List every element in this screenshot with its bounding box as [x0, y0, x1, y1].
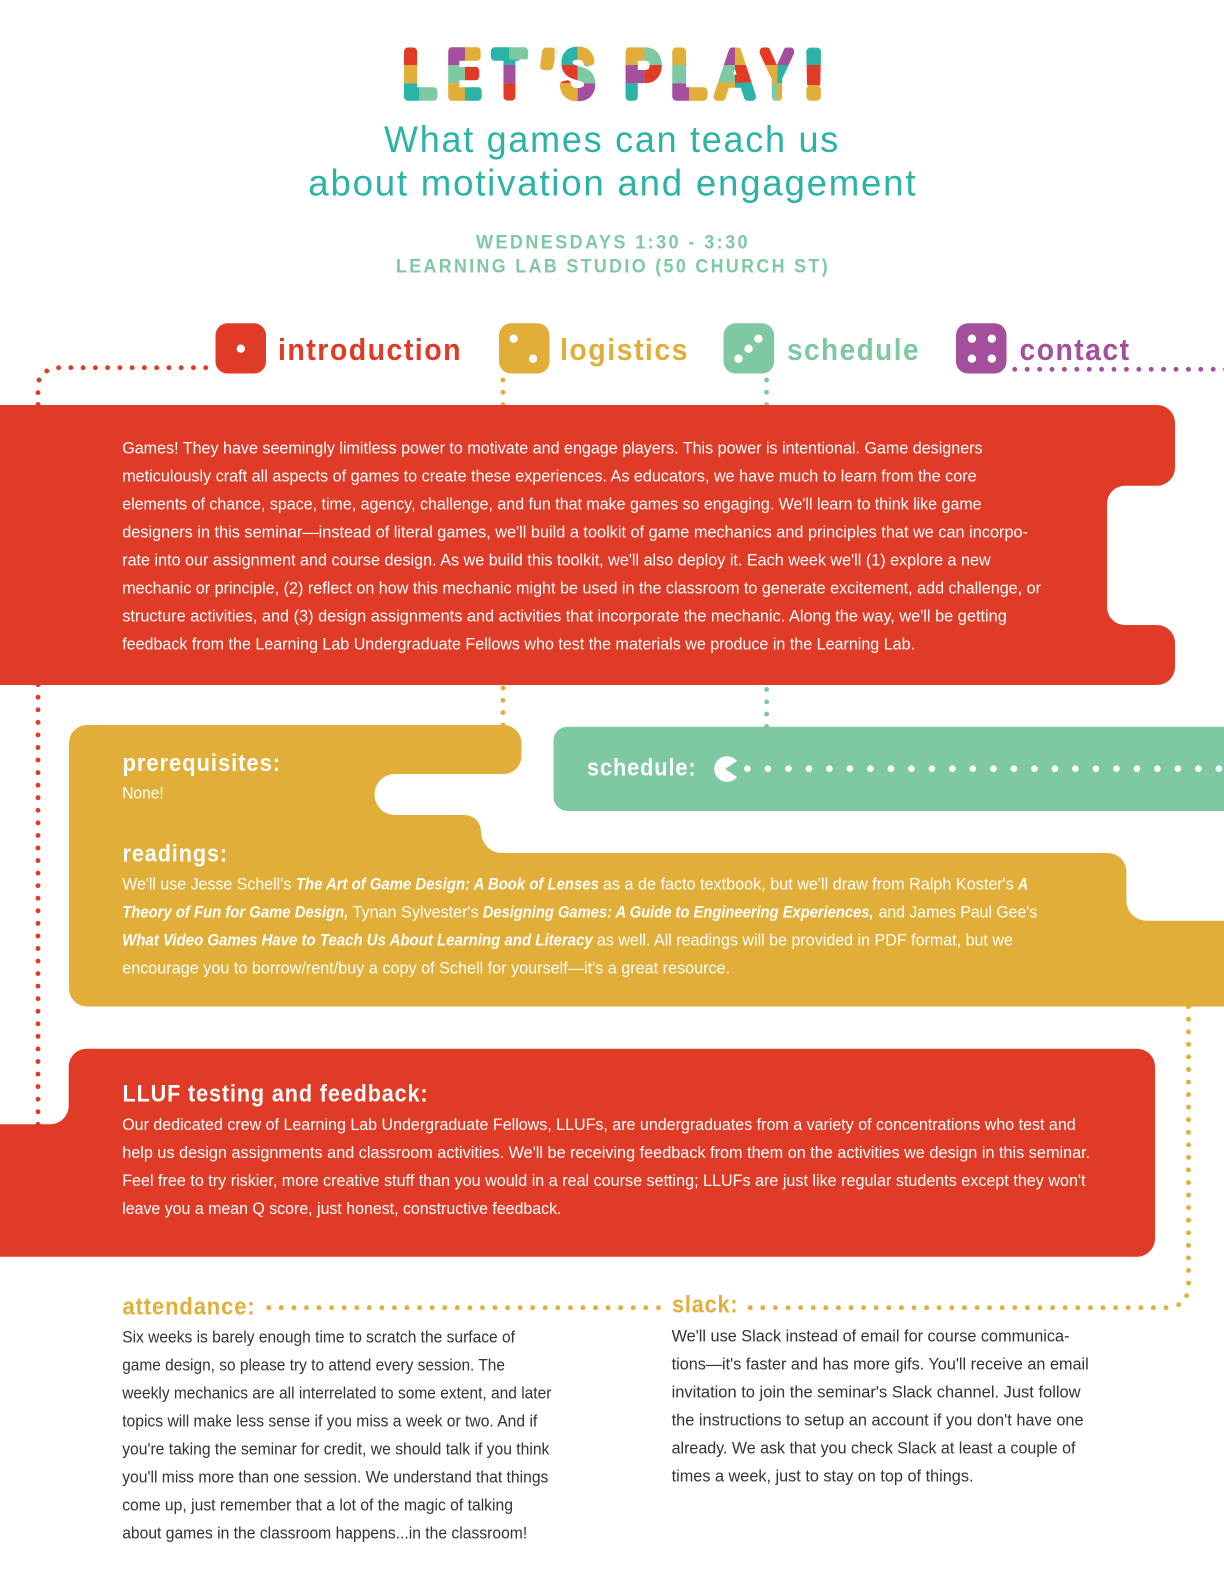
attendance text: Six weeks is barely enough time to scratch the surface of [122, 1328, 515, 1347]
nav: logistics: logistics [560, 332, 689, 367]
prerequisites text: None! [122, 784, 164, 802]
introduction body text: elements of chance, space, time, agency, challenge, and fun that make games so engaging. We'll learn to think like game [122, 494, 982, 514]
readings text: What Video Games Have to Teach Us About Learning and Literacy [122, 931, 594, 950]
yellow dotted connector: logistics [501, 380, 505, 728]
red dotted connector: introduction [36, 368, 206, 1125]
nav: contact: contact [1020, 332, 1130, 367]
readings heading: readings: [122, 840, 228, 868]
title: A [717, 38, 753, 110]
LLUF heading: LLUF testing and feedback: [122, 1081, 428, 1108]
nav: logistics [499, 323, 689, 374]
LLUF text: Feel free to try riskier, more creative stuff than you would in a real course setting; LLUFs are just like regular students except they won't [122, 1171, 1086, 1190]
readings text: as a de facto textbook, but we'll draw from Ralph Koster's [603, 875, 1014, 894]
nav: introduction [216, 323, 462, 374]
slack text: already. We ask that you check Slack at least a couple of [672, 1438, 1076, 1457]
introduction body text: designers in this seminar—instead of literal games, we'll build a toolkit of game mechanics and principles that we can incorpo- [122, 522, 1028, 542]
section: slack [672, 1292, 1089, 1485]
LLUF text: Our dedicated crew of Learning Lab Undergraduate Fellows, LLUFs, are undergraduates from a variety of concentrations who test and [122, 1115, 1076, 1134]
introduction body text: structure activities, and (3) design assignments and activities that incorporate the mechanic. Along the way, we'll be getting [122, 606, 1007, 626]
LLUF text: help us design assignments and classroom activities. We'll be receiving feedback from them on the activities we design in this seminar. [122, 1143, 1090, 1162]
nav: schedule [724, 323, 920, 374]
attendance text: game design, so please try to attend every session. The [122, 1356, 505, 1375]
panel: schedule [554, 727, 1224, 811]
attendance text: about games in the classroom happens...in the classroom! [122, 1524, 527, 1543]
purple dotted connector: contact [1015, 367, 1224, 372]
slack text: times a week, just to stay on top of things. [672, 1466, 974, 1485]
prerequisites heading: prerequisites: [122, 750, 281, 777]
introduction body text: rate into our assignment and course design. As we build this toolkit, we'll also deploy it. Each week we'll (1) explore a new [122, 550, 991, 570]
green dotted connector: schedule [764, 380, 769, 729]
icon: pac-man [714, 756, 737, 782]
introduction body text: mechanic or principle, (2) reflect on how this mechanic might be used in the classroom to generate excitement, add challenge, or [122, 578, 1041, 598]
panel: introduction [0, 405, 1175, 685]
readings text: Tynan Sylvester's [352, 903, 479, 922]
nav: schedule: schedule [787, 332, 920, 367]
readings text: and James Paul Gee's [879, 903, 1037, 922]
subtitle: What games can teach us [384, 119, 840, 160]
introduction body text: meticulously craft all aspects of games to create these experiences. As educators, we have much to learn from the core [122, 466, 977, 486]
yellow dotted connector: slack and attendance [267, 1007, 1189, 1308]
section: attendance [121, 1293, 552, 1543]
readings text: The Art of Game Design: A Book of Lenses [296, 875, 599, 894]
slack text [672, 1326, 1089, 1485]
slack text: invitation to join the seminar's Slack channel. Just follow [672, 1382, 1081, 1401]
slack text: We'll use Slack instead of email for course communica- [672, 1326, 1070, 1345]
readings text: Theory of Fun for Game Design, [122, 903, 348, 922]
title: L [671, 38, 706, 110]
time and location: LEARNING LAB STUDIO (50 CHURCH ST) [396, 256, 830, 278]
subtitle: about motivation and engagement [308, 162, 917, 203]
LLUF text [122, 1115, 1090, 1218]
readings text: A [1017, 875, 1028, 894]
slack text: the instructions to setup an account if you don't have one [672, 1410, 1084, 1429]
title [403, 38, 823, 110]
title: ' [538, 38, 553, 110]
attendance text: weekly mechanics are all interrelated to some extent, and later [121, 1384, 552, 1403]
slack text: tions—it's faster and has more gifs. You'll receive an email [672, 1354, 1089, 1373]
subtitle [308, 119, 917, 203]
readings text [122, 875, 1037, 978]
attendance text: topics will make less sense if you miss a week or two. And if [122, 1412, 538, 1431]
attendance text [121, 1328, 552, 1543]
nav: contact [956, 323, 1130, 374]
introduction body text: Games! They have seemingly limitless power to motivate and engage players. This power is intentional. Game designers [122, 438, 983, 458]
nav: introduction: introduction [278, 332, 462, 367]
readings text: encourage you to borrow/rent/buy a copy of Schell for yourself—it's a great resource. [122, 959, 730, 978]
pac-man dots trail [747, 765, 1224, 772]
introduction body text: feedback from the Learning Lab Undergraduate Fellows who test the materials we produce in the Learning Lab. [122, 634, 915, 654]
title: S [561, 38, 594, 110]
introduction body text [122, 438, 1041, 654]
readings text: as well. All readings will be provided in PDF format, but we [597, 931, 1013, 950]
time and location [396, 232, 830, 278]
schedule heading: schedule: [587, 754, 696, 782]
title: Y [762, 38, 792, 110]
attendance text: you'll miss more than one session. We understand that things [122, 1468, 548, 1487]
attendance heading: attendance: [122, 1293, 256, 1320]
attendance text: you're taking the seminar for credit, we should talk if you think [122, 1440, 550, 1459]
readings text: Designing Games: A Guide to Engineering Experiences, [483, 903, 874, 922]
panel: LLUF testing and feedback [0, 1049, 1155, 1257]
LLUF text: leave you a mean Q score, just honest, constructive feedback. [122, 1199, 561, 1218]
panel: prerequisites and readings [69, 725, 1224, 1006]
time and location: WEDNESDAYS 1:30 - 3:30 [476, 232, 750, 254]
title: P [625, 38, 661, 110]
attendance text: come up, just remember that a lot of the magic of talking [122, 1496, 513, 1515]
title: T [493, 38, 526, 110]
title: ! [805, 38, 823, 110]
title: L [403, 38, 436, 110]
title: E [447, 38, 481, 110]
slack heading: slack: [672, 1292, 738, 1319]
readings text: We'll use Jesse Schell's [122, 875, 291, 894]
